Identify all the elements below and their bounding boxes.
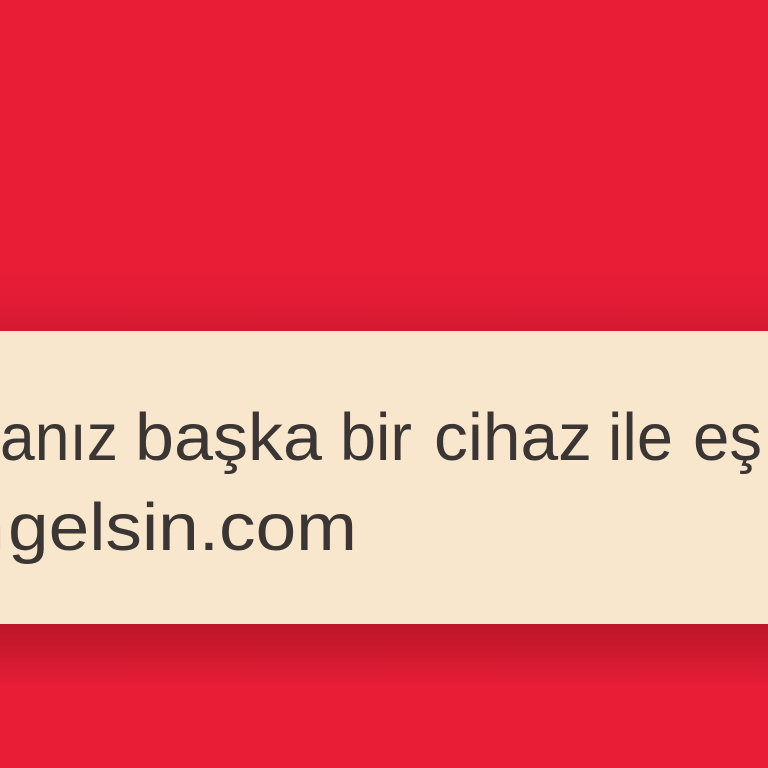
text line: device warning: ile	[608, 400, 673, 475]
text line: device warning: eş	[693, 400, 762, 475]
text line: device warning: anız	[0, 400, 118, 475]
text line: website address: gelsin.com	[8, 490, 357, 565]
text line: device warning: başka	[135, 400, 323, 475]
panel: cream text band	[0, 331, 768, 624]
text line: device warning: cihaz	[434, 400, 592, 475]
text line: device warning	[0, 400, 762, 475]
text line: device warning: bir	[340, 400, 412, 475]
